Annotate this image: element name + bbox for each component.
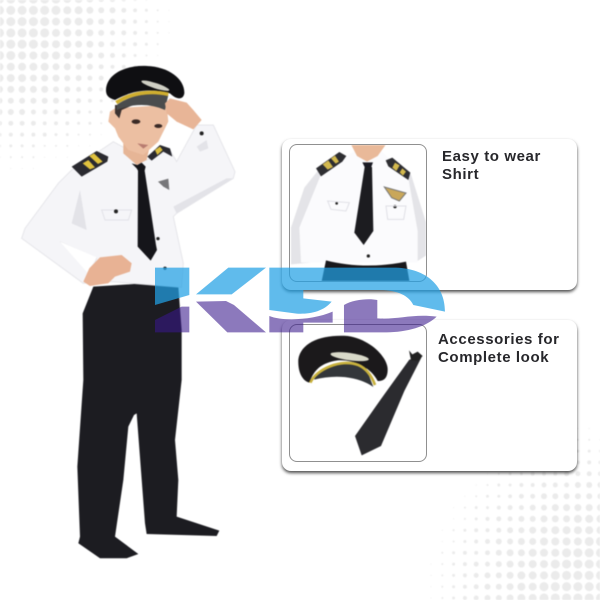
trousers and socks — [77, 283, 219, 558]
shirt caption — [442, 148, 541, 183]
watermark lower purple part — [155, 299, 437, 332]
shirt and upper body — [22, 66, 235, 287]
shirt caption: Easy to wear — [442, 148, 541, 165]
shirt buttons and pocket — [102, 210, 132, 220]
watermark upper blue part — [155, 268, 445, 314]
accessories caption — [438, 331, 560, 366]
epaulettes — [72, 151, 108, 177]
shirt — [22, 125, 235, 287]
tie — [132, 163, 157, 261]
shirt caption: Shirt — [442, 166, 479, 183]
accessories caption: Complete look — [438, 349, 549, 366]
accessories caption: Accessories for — [438, 331, 560, 348]
cap and tie image frame — [289, 324, 427, 462]
cap — [117, 94, 168, 110]
raised hand — [165, 98, 202, 129]
neck and face — [123, 140, 150, 165]
shirt close-up image frame — [289, 144, 427, 282]
panel: easy to wear shirt — [282, 139, 577, 290]
hand on hip — [83, 255, 132, 286]
panel: accessories for complete look — [282, 320, 577, 471]
